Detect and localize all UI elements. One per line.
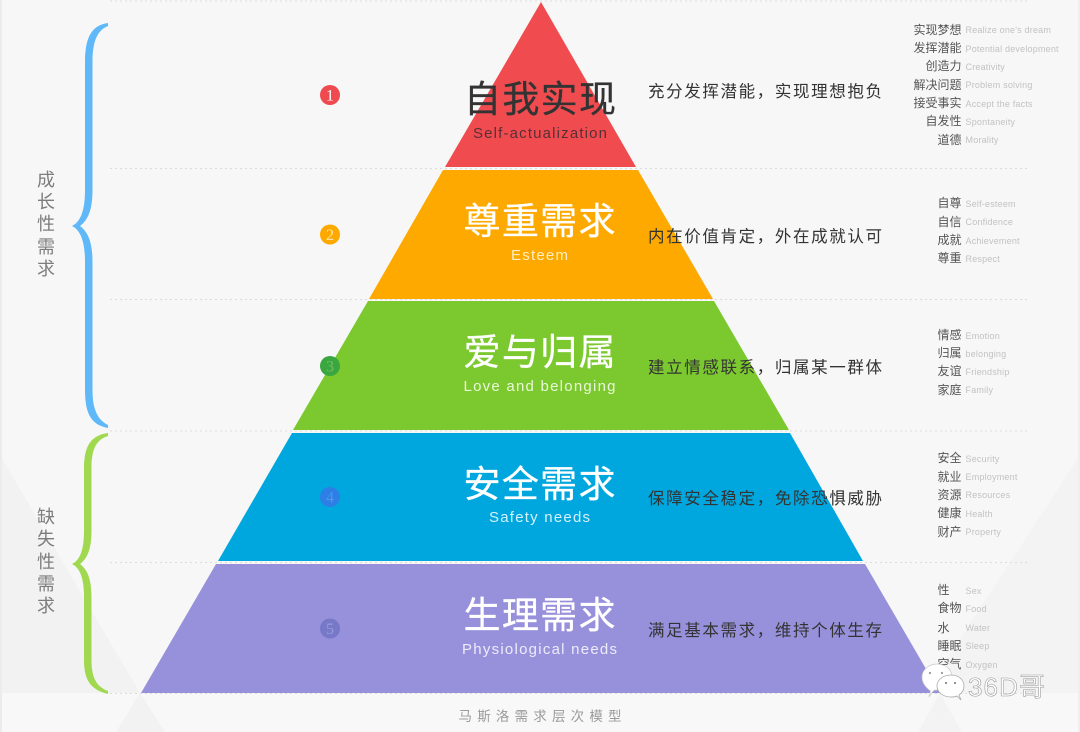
number badge 3: 3 [326,358,334,376]
heading: safety needs: Safety needs [489,509,590,526]
list: safety traits: Property [966,527,1001,537]
list: self-actualization traits [913,22,1059,147]
list: self-actualization traits: 实现梦想 [913,22,962,37]
list: esteem traits: 成就 [937,233,962,247]
tier 3: love and belonging [293,301,789,430]
number badge 5 [320,618,340,638]
label: growth needs: 求 [37,259,55,279]
pyramid [141,2,940,693]
heading: physiological needs: 生理需求 [464,595,616,636]
list: esteem traits: 尊重 [937,250,962,265]
list: safety traits: Security [966,454,1000,464]
icon: WeChat bubbles [922,664,964,700]
label: growth needs: 成 [37,170,55,190]
list: self-actualization traits: 自发性 [925,113,962,128]
list: physiological traits: 食物 [937,600,962,615]
list: safety traits: 安全 [937,450,962,465]
label: deficiency needs: 缺 [37,507,55,527]
list: belonging traits: Friendship [966,367,1010,377]
heading: self-actualization: Self-actualization [473,125,607,142]
list: safety traits [937,450,1018,539]
heading: safety needs [464,464,616,526]
list: esteem traits: Confidence [966,217,1013,227]
list: belonging traits: Emotion [966,331,1000,341]
list: safety traits: 就业 [937,470,962,484]
description 2: 内在价值肯定，外在成就认可 [648,227,882,246]
heading: physiological needs: Physiological needs [462,641,617,658]
list: physiological traits [937,583,998,671]
heading: love and belonging: Love and belonging [464,378,616,395]
watermark name: 36D哥 [968,672,1045,702]
number badge 2 [320,224,340,244]
tier 2: esteem [369,170,713,299]
label: deficiency needs: 求 [37,596,55,616]
heading: love and belonging: 爱与归属 [464,332,616,373]
list: esteem traits: 自尊 [937,195,962,210]
description 4: 保障安全稳定，免除恐惧威胁 [648,489,882,508]
list: self-actualization traits: Realize one's dream [966,25,1051,35]
number badge 2: 2 [326,227,334,244]
tier 5: physiological needs [141,564,940,693]
list: physiological traits: Sex [966,586,982,596]
list: safety traits: 健康 [937,505,962,520]
list: belonging traits: Family [966,385,993,395]
heading: esteem [464,201,616,264]
list: self-actualization traits: Morality [966,135,999,145]
label: growth needs: 需 [37,237,55,257]
heading: love and belonging [464,332,616,395]
list: self-actualization traits: Potential development [966,44,1059,54]
label: growth needs: 性 [37,214,55,234]
list: safety traits: Resources [966,490,1011,500]
list: belonging traits: 情感 [937,327,962,342]
tier 4: safety needs [218,433,863,561]
label: growth needs: 长 [37,192,55,212]
list: physiological traits: 睡眠 [937,639,962,653]
heading: self-actualization [464,79,616,142]
heading: safety needs: 安全需求 [464,464,616,505]
list: belonging traits: 归属 [937,346,962,360]
label: deficiency needs [37,507,55,616]
list: physiological traits: 性 [937,583,950,597]
list: safety traits: 资源 [937,488,962,502]
description 5: 满足基本需求，维持个体生存 [648,621,882,640]
list: belonging traits: belonging [966,349,1006,359]
list: self-actualization traits: Accept the facts [966,99,1033,109]
list: esteem traits: 自信 [937,215,962,229]
label: growth needs [37,170,55,279]
heading: self-actualization: 自我实现 [464,79,616,120]
heading: esteem: Esteem [511,247,568,264]
list: self-actualization traits: Spontaneity [966,117,1016,127]
list: esteem traits: Respect [966,254,1000,264]
number badge 4: 4 [326,490,334,506]
label: deficiency needs: 需 [37,574,55,594]
description 3: 建立情感联系，归属某一群体 [648,358,882,377]
number badge 5: 5 [326,621,334,638]
list: esteem traits: Self-esteem [966,199,1016,209]
list: self-actualization traits: 道德 [937,132,962,147]
watermark: WeChat logo and name [922,664,1045,702]
heading: esteem: 尊重需求 [464,201,616,242]
tier 1: self-actualization [445,2,636,167]
list: physiological traits: 水 [937,621,950,635]
list: belonging traits: 家庭 [937,382,962,397]
list: belonging traits: 友谊 [937,363,962,378]
heading: physiological needs [462,595,617,658]
list: self-actualization traits: Problem solving [966,80,1033,90]
list: safety traits: Health [966,509,993,519]
list: self-actualization traits: Creativity [966,62,1005,72]
list: self-actualization traits: 解决问题 [913,78,962,92]
label: deficiency needs: 性 [37,552,55,572]
list: physiological traits: Sleep [966,641,990,651]
list: self-actualization traits: 接受事实 [913,95,962,110]
description 1: 充分发挥潜能，实现理想抱负 [648,82,882,101]
number badge 4 [320,487,340,507]
list: belonging traits [937,327,1010,397]
list: self-actualization traits: 发挥潜能 [913,40,962,55]
brace: growth needs [72,23,108,428]
number badge 1: 1 [326,88,334,104]
list: safety traits: Employment [966,472,1018,482]
list: self-actualization traits: 创造力 [925,59,962,73]
list: esteem traits: Achievement [966,236,1020,246]
label: deficiency needs: 失 [37,529,55,549]
number badge 3 [320,356,340,376]
number badge 1 [320,85,340,105]
brace: deficiency needs [72,433,108,694]
list: physiological traits: Food [966,604,987,614]
list: physiological traits: 空气 [937,656,962,671]
list: physiological traits: Water [966,623,990,633]
list: safety traits: 财产 [937,525,962,539]
list: esteem traits [937,195,1020,265]
caption: 马斯洛需求层次模型 [458,709,622,724]
list: physiological traits: Oxygen [966,660,998,670]
